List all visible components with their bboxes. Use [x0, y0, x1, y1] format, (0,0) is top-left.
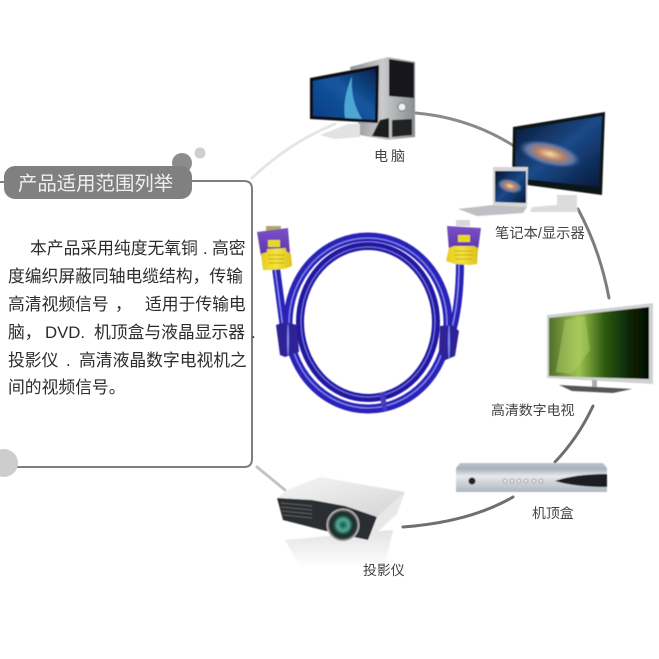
lens	[326, 508, 360, 542]
decorative dark dot	[172, 153, 192, 173]
label: laptop / monitor: 笔记本/显示器	[495, 225, 585, 242]
device: monitor and laptop	[458, 112, 605, 216]
label: HD digital TV: 高清数字电视	[491, 402, 574, 418]
decorative corner dot	[0, 449, 18, 477]
heading pill: 产品适用范围列举	[18, 173, 173, 195]
left connector	[257, 226, 292, 270]
monitor	[310, 65, 379, 123]
heading pill	[4, 166, 192, 199]
description text: 适用于传输电	[145, 295, 246, 314]
description text: 脑，	[8, 323, 42, 342]
left ferrite	[276, 322, 299, 357]
cable clip	[379, 392, 387, 411]
laptop	[458, 167, 528, 216]
description text: ，	[115, 295, 132, 314]
description text: DVD.	[45, 323, 85, 342]
front	[277, 498, 377, 540]
vent grille	[281, 503, 312, 518]
description text: 高密	[212, 239, 246, 258]
tower	[350, 57, 415, 140]
panel: product applications	[0, 148, 260, 477]
ring connecting the devices	[252, 113, 609, 527]
description text: .	[203, 239, 208, 258]
stand	[530, 195, 578, 212]
device: set-top box	[456, 463, 607, 492]
cable loop	[275, 237, 460, 409]
device: HD television	[547, 303, 653, 393]
description text: 间的视频信号。	[8, 378, 125, 397]
right connector	[446, 220, 481, 265]
device: projector	[277, 477, 405, 567]
monitor	[512, 112, 605, 195]
label: computer: 电脑	[374, 148, 408, 164]
decorative light dot	[194, 148, 206, 158]
description text: 本产品采用纯度无氧铜	[30, 239, 198, 258]
label: set-top box: 机顶盒	[532, 505, 574, 521]
description text: .	[251, 323, 256, 342]
top body	[277, 477, 405, 517]
VGA cable	[257, 220, 481, 411]
monitor stand	[320, 124, 360, 139]
description text: 机顶盒与液晶显示器	[94, 323, 245, 342]
device: desktop computer	[310, 57, 415, 140]
description text: 高清液晶数字电视机之	[79, 351, 247, 370]
description text: 度编织屏蔽同轴电缆结构，传输	[8, 267, 243, 286]
side	[368, 492, 405, 541]
description text: .	[66, 351, 71, 370]
right ferrite	[439, 325, 459, 361]
description text: 高清视频信号	[8, 295, 109, 314]
label: projector: 投影仪	[363, 562, 405, 578]
description text: 投影仪	[8, 351, 59, 370]
reflection	[285, 530, 393, 567]
